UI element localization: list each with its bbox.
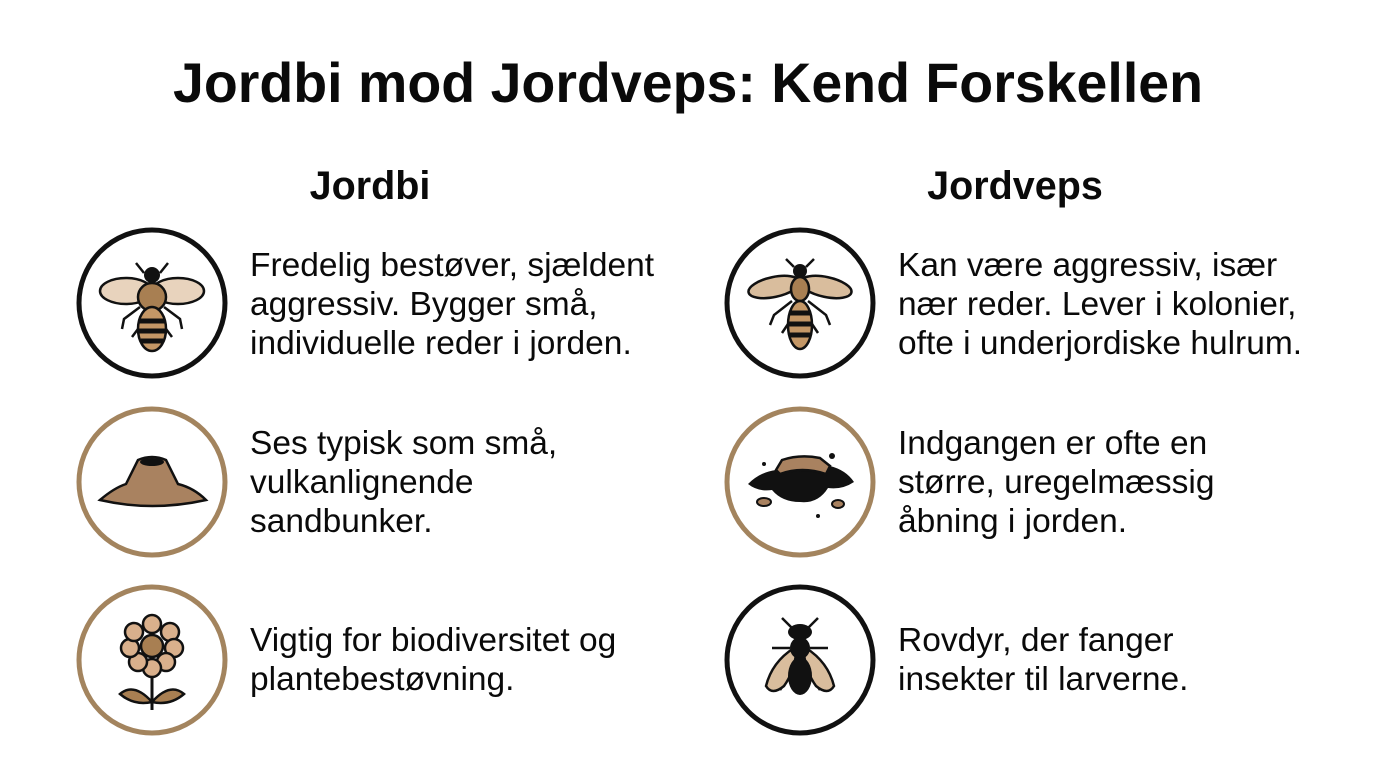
text: biodiversity: Vigtig for biodiversitet og <box>250 622 616 659</box>
text: fly predator <box>898 622 1188 698</box>
text: biodiversity <box>250 622 616 698</box>
text: wasp behaviour: Kan være aggressiv, især <box>898 247 1277 284</box>
text: wasp behaviour: ofte i underjordiske hulrum. <box>898 325 1302 362</box>
text: sand mound: sandbunker. <box>250 503 433 540</box>
title: Jordbi mod Jordveps: Kend Forskellen <box>173 52 1203 114</box>
text: bee behaviour: individuelle reder i jorden. <box>250 325 632 362</box>
text: bee behaviour <box>250 247 654 362</box>
heading: Jordveps: Jordveps <box>927 164 1103 208</box>
text: hole <box>898 425 1214 540</box>
text: hole: Indgangen er ofte en <box>898 425 1207 462</box>
icon: flower <box>76 584 228 736</box>
text: wasp behaviour <box>898 247 1302 362</box>
text: bee behaviour: Fredelig bestøver, sjældent <box>250 247 654 284</box>
text: wasp behaviour: nær reder. Lever i kolonier, <box>898 286 1296 323</box>
text: sand mound: vulkanlignende <box>250 464 474 501</box>
icon: wasp <box>724 228 876 378</box>
text: biodiversity: plantebestøvning. <box>250 661 514 698</box>
text: hole: større, uregelmæssig <box>898 464 1214 501</box>
text: bee behaviour: aggressiv. Bygger små, <box>250 286 598 323</box>
text: hole: åbning i jorden. <box>898 503 1127 540</box>
icon: hole <box>724 406 876 558</box>
icon: bee <box>76 228 228 378</box>
text: fly predator: Rovdyr, der fanger <box>898 622 1174 659</box>
icon: fly <box>724 584 876 736</box>
text: sand mound: Ses typisk som små, <box>250 425 557 462</box>
icon: sand mound <box>76 406 228 558</box>
heading: Jordbi: Jordbi <box>310 164 430 208</box>
text: sand mound <box>250 425 557 540</box>
text: fly predator: insekter til larverne. <box>898 661 1188 698</box>
